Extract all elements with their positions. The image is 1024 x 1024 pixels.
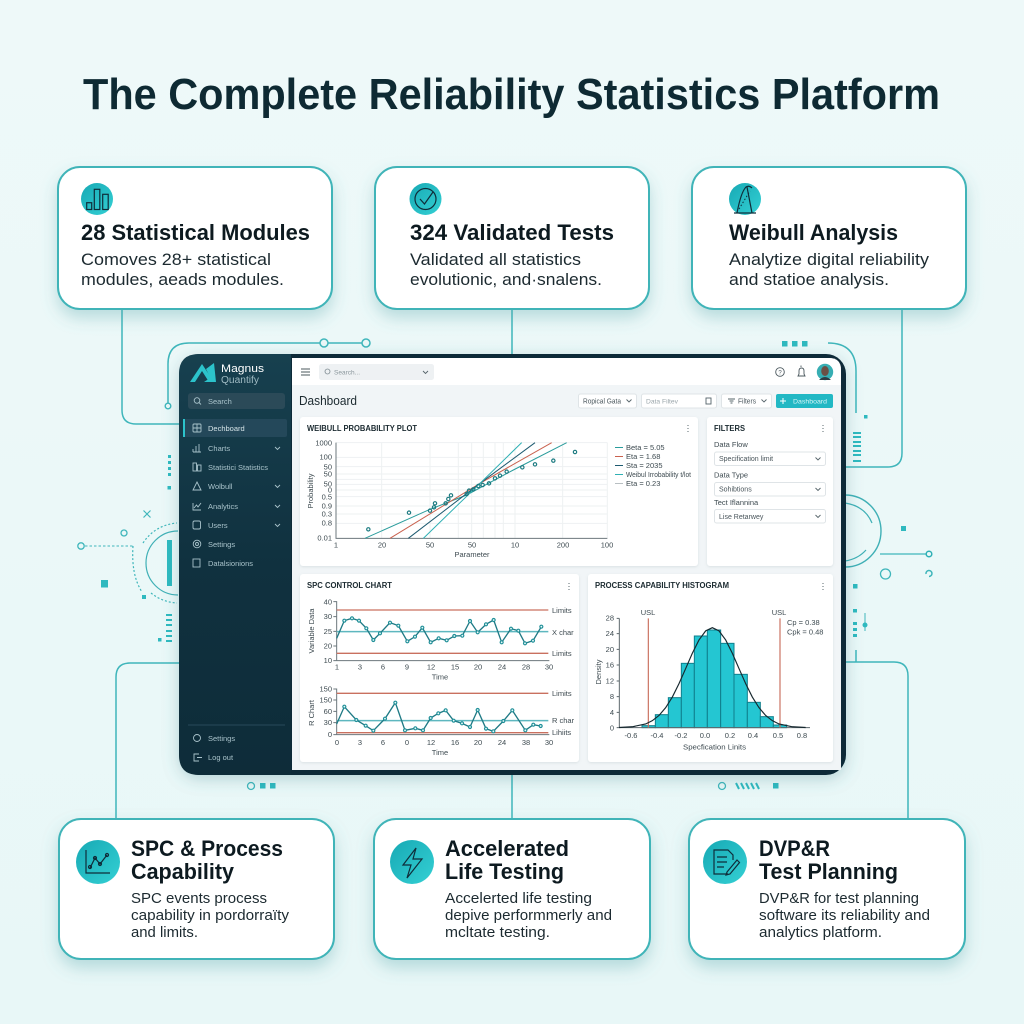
x-bar chart: 24	[498, 662, 506, 672]
range chart: R char	[552, 716, 575, 725]
icon: menu	[301, 369, 310, 375]
range chart: Lihiits	[552, 728, 571, 737]
body text	[445, 890, 612, 941]
weibull chart: 0.9	[322, 502, 332, 510]
legend: Weibul Irrobability t/lot	[626, 470, 692, 479]
nav item: users: Users	[208, 521, 228, 530]
toolbar controls: Dashboard	[793, 398, 827, 406]
top bar	[292, 358, 841, 385]
panel heading: SPC CONTROL CHART	[307, 581, 392, 590]
x-bar chart: Variable Data	[307, 608, 316, 653]
heading: Test Planning	[759, 859, 898, 884]
panel: filters	[707, 417, 833, 566]
decoration: right circuit motifs	[782, 341, 932, 637]
title: The Complete Reliability Statistics Platform	[83, 70, 940, 119]
weibull chart: 0.5	[322, 492, 332, 502]
range chart: 150	[319, 684, 332, 694]
x-bar chart: 20	[474, 662, 482, 672]
weibull chart: 0	[328, 486, 332, 494]
range chart: 38	[522, 738, 530, 747]
panel heading: FILTERS	[714, 424, 746, 433]
range chart: 30	[545, 738, 553, 747]
dashboard window	[179, 354, 846, 775]
filter: data flow	[714, 440, 826, 466]
x-bar chart: Limits	[552, 606, 572, 615]
body text: and statioe analysis.	[729, 270, 889, 289]
body text: capability in pordorraïty	[131, 907, 290, 924]
heading	[759, 836, 898, 884]
icon: document and pencil	[703, 840, 747, 884]
body text: DVP&R for test planning	[759, 890, 919, 907]
legend: Eta = 0.23	[626, 479, 660, 488]
heading: 28 Statistical Modules	[81, 220, 310, 245]
body text: depive performmerly and	[445, 907, 612, 924]
range chart: Limits	[552, 689, 572, 698]
range chart: Time	[432, 748, 448, 757]
toolbar controls: Ropical Gata	[583, 398, 621, 406]
body text: evolutionic, and·snalens.	[410, 270, 602, 289]
dashboard heading: Dashboard	[299, 393, 357, 408]
nav item: log out: Log out	[208, 753, 234, 762]
nav item: log out	[194, 753, 234, 762]
card: SPC & Process Capability	[59, 819, 334, 959]
range chart: 60	[324, 707, 332, 716]
body text	[81, 250, 284, 289]
body text: mcltate testing.	[445, 924, 550, 941]
weibull chart: 10	[511, 540, 519, 550]
histogram chart: USL	[641, 608, 655, 617]
decoration: bottom markers	[248, 782, 778, 790]
sidebar search: Search	[208, 397, 232, 406]
range chart: 20	[474, 738, 482, 747]
nav item: analytics: Analytics	[208, 502, 238, 511]
range chart: 3	[358, 738, 362, 747]
weibull chart: 0.3	[322, 510, 332, 518]
histogram chart: 8	[610, 692, 614, 701]
range chart: 12	[427, 738, 435, 747]
nav item: weibull: Wolbull	[208, 482, 233, 491]
filter: data type: Sohibtions	[719, 486, 752, 494]
legend: Eta = 1.68	[626, 452, 660, 461]
range chart: 0	[328, 730, 332, 739]
histogram chart: 0.5	[773, 731, 783, 740]
decoration: left circuit motifs	[78, 455, 178, 642]
sidebar search	[188, 393, 285, 409]
avatar	[817, 364, 833, 380]
weibull chart: 20	[378, 540, 386, 550]
logo: Magnus	[221, 363, 265, 375]
histogram chart: Density	[594, 659, 603, 685]
heading: 324 Validated Tests	[410, 220, 614, 245]
range chart: 0	[335, 738, 339, 747]
menu dots	[687, 425, 689, 432]
x-bar chart: 40	[324, 598, 332, 606]
body text: Comoves 28+ statistical	[81, 250, 271, 269]
card: Accelerated Life Testing	[374, 819, 650, 959]
x-bar chart: 30	[324, 612, 332, 621]
body text: Analytize digital reliability	[729, 250, 930, 269]
body text: Validated all statistics	[410, 250, 581, 269]
icon: bell	[798, 366, 805, 376]
toolbar controls: Filters	[738, 398, 756, 406]
weibull chart: Parameter	[454, 550, 490, 559]
range chart: 6	[381, 738, 385, 747]
heading: DVP&R	[759, 836, 830, 861]
nav item: charts	[193, 444, 280, 453]
weibull chart: 1000	[315, 438, 332, 448]
x-bar chart: 30	[545, 662, 553, 672]
histogram chart: 20	[606, 645, 614, 654]
weibull chart: 50	[324, 480, 332, 488]
x-bar chart: 12	[427, 662, 435, 672]
weibull chart: 50	[324, 462, 332, 472]
range chart: R Chart	[307, 699, 316, 726]
histogram chart	[594, 608, 823, 752]
filter: data flow: Data Flow	[714, 440, 748, 449]
body text: modules, aeads modules.	[81, 270, 284, 289]
card: 28 Statistical Modules	[58, 167, 332, 309]
histogram chart: 28	[606, 614, 614, 622]
body text: SPC events process	[131, 890, 267, 907]
main content background	[292, 358, 841, 770]
range chart: 30	[324, 718, 332, 727]
range chart: 150	[319, 696, 332, 704]
nav item: dashboard active	[183, 419, 287, 437]
heading: Life Testing	[445, 859, 564, 884]
connector lines	[116, 309, 908, 819]
x-bar chart: X char	[552, 628, 574, 637]
nav item: data: Datalsionions	[208, 559, 253, 568]
heading	[131, 836, 283, 884]
card: 324 Validated Tests	[375, 167, 649, 309]
card: Weibull Analysis	[692, 167, 966, 309]
weibull chart: 50	[324, 470, 332, 478]
legend: Sta = 2035	[626, 461, 662, 470]
weibull chart: 100	[319, 452, 332, 462]
menu dots	[822, 583, 824, 590]
histogram chart: 0	[610, 724, 614, 732]
filter: test planning: Lise Retarwey	[719, 514, 764, 521]
panel heading: WEIBULL PROBABILITY PLOT	[307, 424, 417, 433]
card: DVP&R Test Planning	[689, 819, 965, 959]
weibull chart: 0.8	[322, 518, 332, 528]
body text	[410, 250, 602, 289]
sidebar	[179, 354, 291, 775]
weibull chart: 100	[601, 540, 613, 550]
toolbar controls: Data Filtev	[646, 398, 679, 406]
x-bar chart: 1	[335, 662, 339, 672]
body text: Accelerted life testing	[445, 890, 592, 907]
weibull chart: 1	[334, 540, 338, 550]
icon: help: ?	[778, 370, 782, 376]
histogram chart: -0.2	[675, 731, 687, 740]
nav item: settings	[193, 540, 235, 549]
histogram chart: Cpk = 0.48	[787, 628, 823, 636]
panel: spc control chart	[300, 574, 579, 762]
histogram chart: Specfication Linits	[683, 742, 746, 752]
nav item: charts: Charts	[208, 444, 230, 453]
legend	[615, 443, 692, 488]
panel heading: PROCESS CAPABILITY HISTOGRAM	[595, 581, 729, 590]
x-bar chart	[307, 598, 574, 682]
panel: process capability histogram	[588, 574, 833, 762]
search box: Search...	[334, 370, 360, 376]
histogram chart: 0.4	[748, 731, 758, 740]
x-bar chart: 20	[324, 642, 332, 650]
menu dots	[568, 583, 570, 590]
histogram chart: 4	[610, 708, 614, 717]
histogram chart: 24	[606, 629, 614, 638]
toolbar controls	[578, 394, 833, 408]
x-bar chart: 25	[324, 627, 332, 636]
x-bar chart: 9	[405, 662, 409, 672]
x-bar chart: 3	[358, 662, 362, 672]
histogram chart: USL	[772, 608, 786, 617]
menu dots	[822, 425, 824, 432]
x-bar chart: 28	[522, 662, 530, 672]
panel: weibull probability plot	[300, 417, 698, 566]
weibull chart: 0.01	[317, 534, 332, 542]
nav item: bottom settings: Settings	[208, 734, 235, 743]
icon: lightning	[390, 840, 434, 884]
x-bar chart: 6	[381, 662, 385, 672]
nav item: analytics	[193, 502, 280, 511]
icon: help	[776, 368, 784, 376]
body text: analytics platform.	[759, 924, 882, 941]
range chart: 16	[451, 738, 459, 747]
logo	[190, 363, 265, 386]
icon: line chart	[76, 840, 120, 884]
body text	[759, 890, 930, 941]
weibull chart: 50	[468, 540, 476, 550]
filter: test planning	[714, 498, 826, 523]
heading: Capability	[131, 859, 235, 884]
icon: weibull curve	[729, 183, 761, 215]
icon: bar chart	[81, 183, 113, 215]
body text: software its reliability and	[759, 907, 930, 924]
nav item: statistics: Statistici Statistics	[208, 463, 268, 472]
heading	[445, 836, 569, 884]
histogram chart: 0.8	[797, 731, 807, 740]
nav item: bottom settings	[194, 734, 235, 743]
x-bar chart: 10	[324, 656, 332, 665]
weibull chart: 200	[557, 540, 569, 550]
heading: SPC & Process	[131, 836, 283, 861]
nav item: settings: Settings	[208, 540, 235, 549]
histogram chart: -0.6	[625, 731, 637, 740]
weibull chart: 50	[426, 540, 434, 550]
nav item: users	[193, 521, 280, 530]
search box	[319, 364, 434, 380]
heading: Weibull Analysis	[729, 220, 898, 245]
weibull chart	[306, 438, 613, 559]
x-bar chart: Limits	[552, 649, 572, 658]
body text: and limits.	[131, 924, 198, 941]
body text	[131, 890, 290, 941]
filter: data flow: Specification limit	[719, 456, 773, 463]
range chart: 24	[498, 738, 506, 747]
range chart	[307, 684, 575, 757]
filter: data type: Data Type	[714, 470, 748, 480]
histogram chart: 0.2	[725, 731, 735, 740]
histogram chart: Cp = 0.38	[787, 618, 820, 627]
histogram chart: -0.4	[651, 731, 663, 740]
body text	[729, 250, 930, 289]
histogram chart: 12	[606, 676, 614, 686]
filter: data type	[714, 470, 826, 496]
icon: check circle	[410, 183, 442, 215]
heading: Accelerated	[445, 836, 569, 861]
x-bar chart: Time	[432, 672, 448, 682]
weibull chart: Probability	[306, 473, 315, 509]
range chart: 0	[405, 738, 409, 747]
histogram chart: 0.0	[700, 731, 710, 740]
nav item: dashboard active: Dechboard	[208, 424, 245, 433]
nav item: weibull	[193, 482, 280, 491]
x-bar chart: 15	[451, 662, 459, 672]
filter: test planning: Tect Iflannina	[714, 498, 759, 507]
histogram chart: 16	[606, 660, 614, 670]
logo: Quantify	[221, 375, 259, 386]
legend: Beta = 5.05	[626, 443, 665, 452]
